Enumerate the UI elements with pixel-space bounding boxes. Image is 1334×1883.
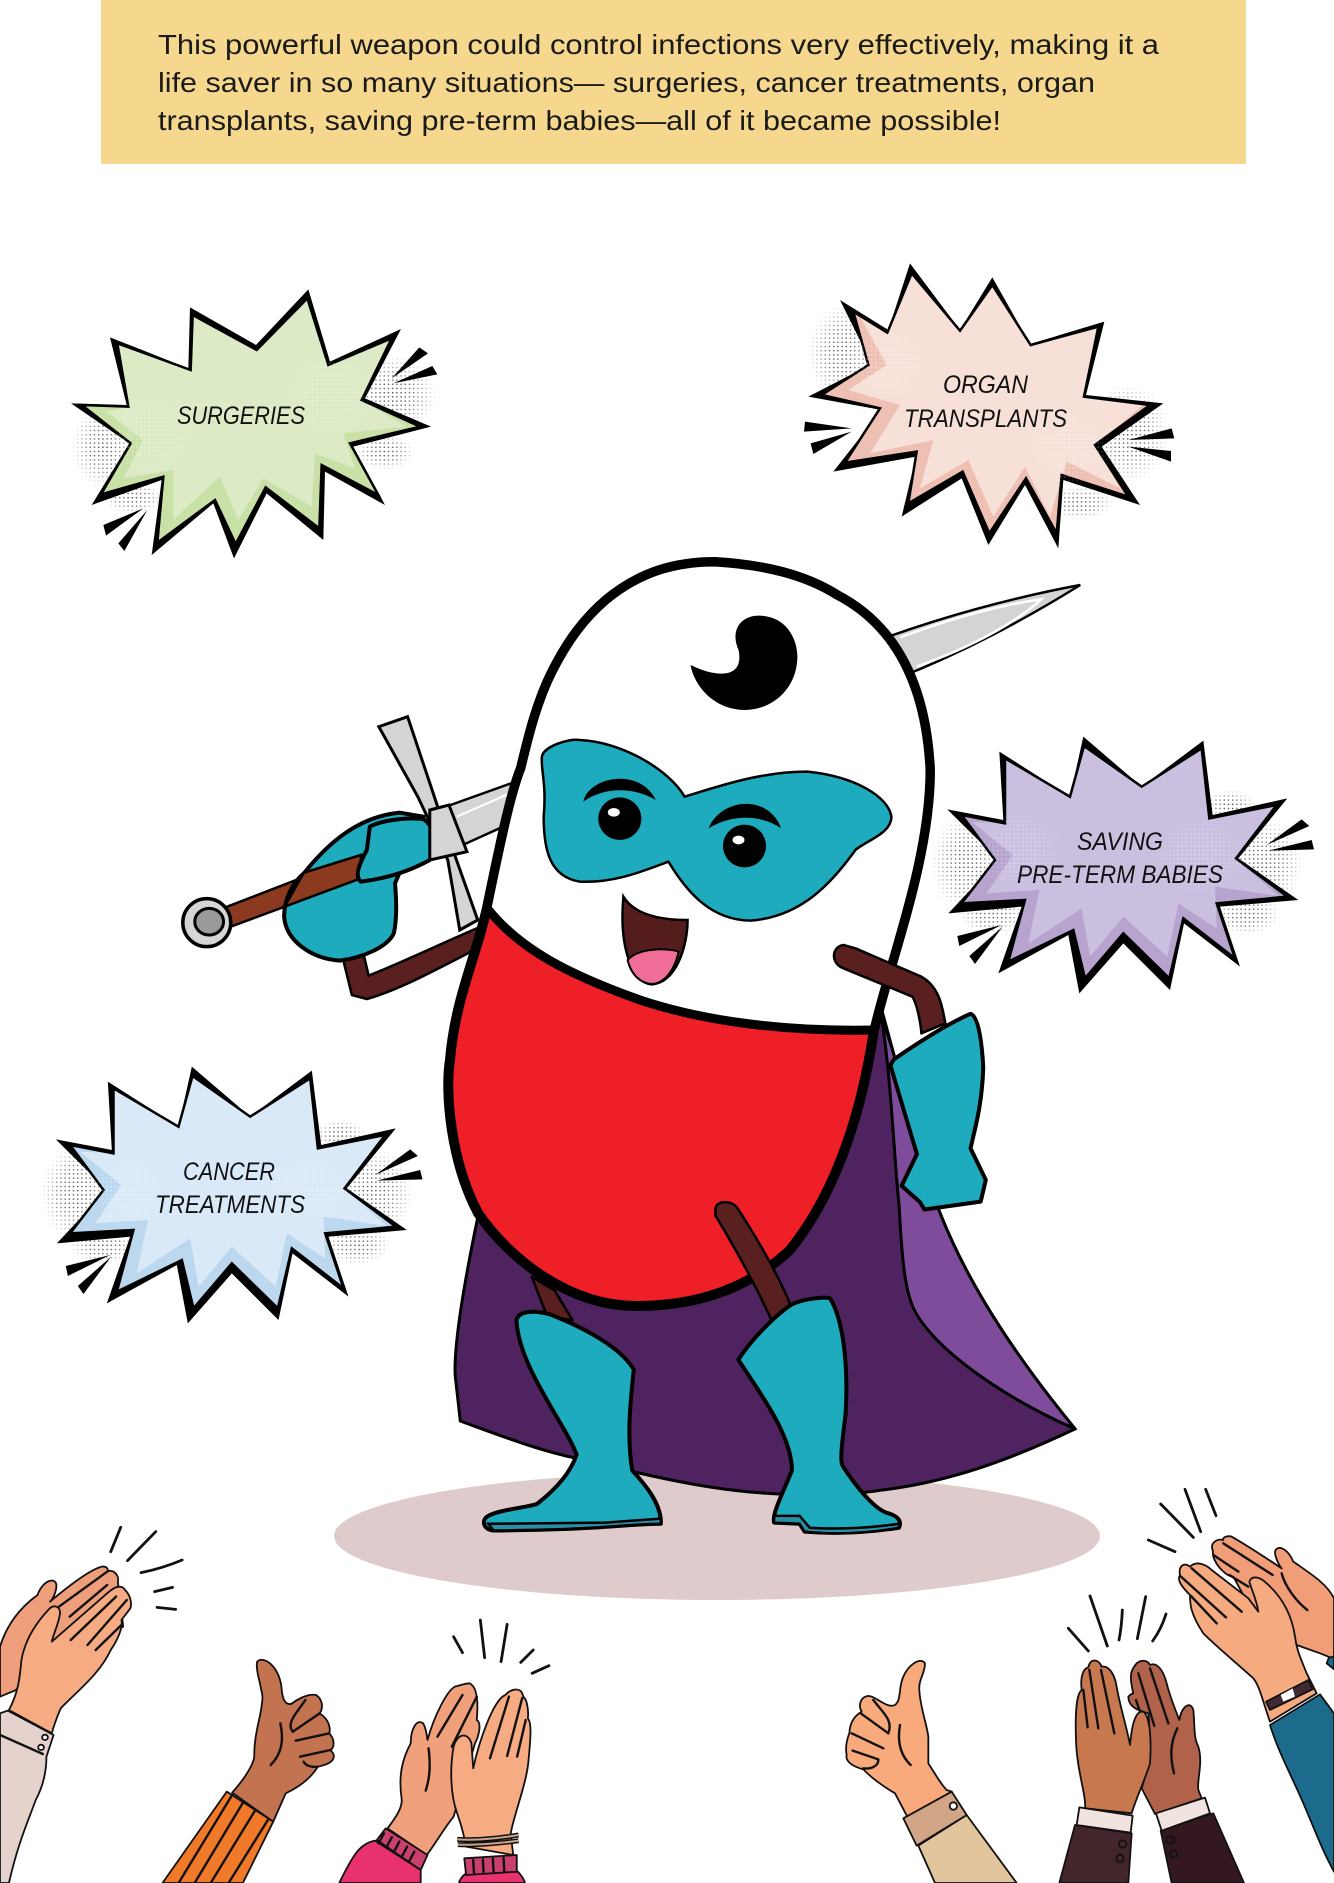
applause sparks left bbox=[111, 1527, 182, 1609]
right arm bbox=[834, 945, 945, 1033]
head logo bbox=[691, 616, 797, 710]
legs bbox=[532, 1202, 792, 1320]
ground shadow bbox=[334, 1472, 1100, 1600]
hands: lower right group bbox=[846, 1489, 1334, 1883]
cape bbox=[455, 1008, 1075, 1495]
eyes bbox=[598, 797, 766, 867]
clapping hands upper right bbox=[1179, 1536, 1334, 1872]
applause sparks centre bbox=[454, 1620, 549, 1673]
sword bbox=[183, 585, 1080, 947]
label: cancer treatments: CANCER bbox=[183, 1158, 275, 1186]
label: organ transplants: ORGAN bbox=[943, 371, 1029, 399]
clapping hands pink sleeves bbox=[339, 1683, 531, 1883]
mouth bbox=[623, 897, 688, 984]
label: surgeries: SURGERIES bbox=[177, 402, 305, 430]
label: cancer treatments: TREATMENTS bbox=[155, 1191, 305, 1219]
clapping dark hands bbox=[1059, 1660, 1244, 1883]
intro text: life saver in so many situations— surgeries, cancer treatments, organ bbox=[158, 67, 1095, 98]
intro text: This powerful weapon could control infections very effectively, making it a bbox=[158, 29, 1159, 60]
thumbs up brown hand bbox=[162, 1660, 334, 1883]
label: organ transplants bbox=[904, 371, 1067, 433]
capsule body bbox=[448, 562, 930, 1306]
label: saving pre-term babies bbox=[1017, 828, 1223, 889]
burst: cancer treatments bbox=[40, 1067, 422, 1323]
red lower half bbox=[448, 562, 930, 1306]
sword handle and pommel bbox=[183, 855, 361, 947]
hands: lower left group bbox=[0, 1527, 549, 1883]
label: saving pre-term babies: SAVING bbox=[1077, 828, 1163, 856]
intro text: transplants, saving pre-term babies—all of it became possible! bbox=[158, 105, 1001, 136]
intro banner bbox=[101, 0, 1246, 164]
applause sparks far right bbox=[1148, 1489, 1216, 1552]
left glove bbox=[284, 805, 467, 961]
burst: surgeries bbox=[71, 289, 438, 558]
pill superhero character bbox=[183, 562, 1080, 1533]
right boot bbox=[738, 1298, 900, 1533]
white upper half bbox=[487, 562, 930, 1030]
burst: saving pre-term babies bbox=[930, 737, 1314, 993]
left arm bbox=[343, 927, 481, 999]
sword blade bbox=[448, 585, 1080, 845]
teal mask bbox=[542, 740, 891, 921]
burst: organ transplants bbox=[804, 263, 1174, 548]
left boot bbox=[484, 1312, 661, 1530]
thumbs up light hand bbox=[846, 1661, 1017, 1883]
right glove bbox=[890, 1014, 986, 1210]
face bbox=[542, 616, 891, 984]
applause sparks right centre bbox=[1068, 1596, 1166, 1651]
label: organ transplants: TRANSPLANTS bbox=[904, 405, 1067, 433]
eyebrows bbox=[583, 779, 781, 828]
clapping hands far left bbox=[0, 1567, 131, 1883]
intro text bbox=[158, 29, 1159, 136]
label: saving pre-term babies: PRE-TERM BABIES bbox=[1017, 861, 1223, 889]
sword crossguard bbox=[379, 717, 478, 930]
label: cancer treatments bbox=[155, 1158, 305, 1219]
